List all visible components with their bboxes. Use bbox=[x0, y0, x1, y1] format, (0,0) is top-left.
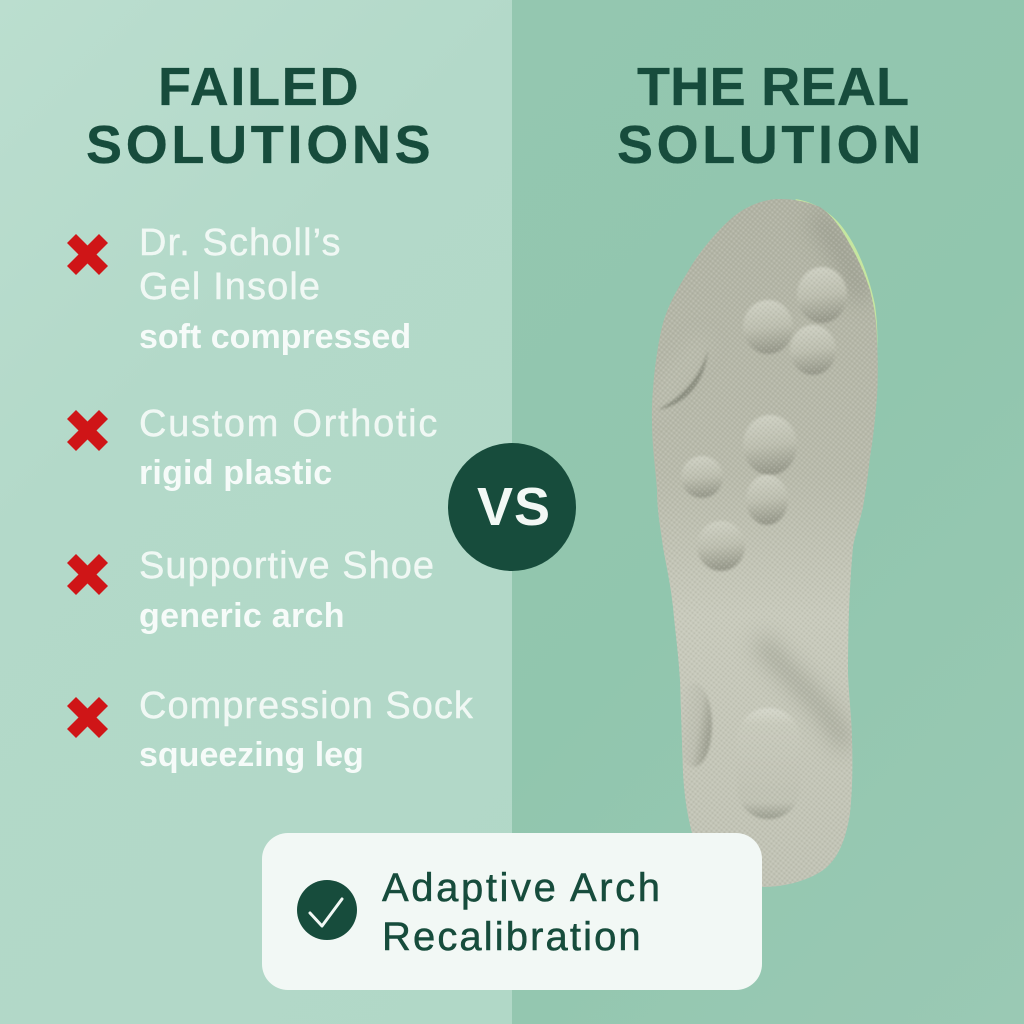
callout text: Adaptive Arch bbox=[382, 866, 663, 910]
callout: Adaptive Arch Recalibration bbox=[262, 833, 762, 990]
heading: the real solution: THE REAL bbox=[637, 57, 909, 117]
list item: Supportive Shoe bbox=[67, 545, 435, 635]
list item: Dr. Scholl's Gel Insole bbox=[67, 222, 411, 356]
item text: generic arch bbox=[139, 597, 345, 635]
heading: the real solution: SOLUTION bbox=[617, 115, 925, 175]
item text: Custom Orthotic bbox=[139, 403, 439, 445]
heading: failed solutions: SOLUTIONS bbox=[86, 115, 434, 175]
item text: rigid plastic bbox=[139, 454, 332, 492]
item text bbox=[139, 545, 435, 635]
badge: VS bbox=[448, 443, 576, 571]
item text: Compression Sock bbox=[139, 685, 474, 727]
icon: check circle bbox=[297, 880, 357, 940]
panel: real solution background bbox=[512, 0, 1024, 1024]
item text bbox=[139, 685, 474, 774]
heading: failed solutions: FAILED bbox=[158, 57, 360, 117]
item text: squeezing leg bbox=[139, 736, 364, 774]
panel: failed solutions background bbox=[0, 0, 512, 1024]
icon: red cross bbox=[67, 554, 108, 595]
green edge of insole bbox=[795, 199, 877, 352]
callout text: Recalibration bbox=[382, 915, 643, 959]
icon: red cross bbox=[67, 697, 108, 738]
item text bbox=[139, 403, 439, 492]
item text: soft compressed bbox=[139, 318, 411, 356]
list item: Custom Orthotic bbox=[67, 403, 439, 492]
icon: red cross bbox=[67, 410, 108, 451]
item text: Supportive Shoe bbox=[139, 545, 435, 587]
icon: insole bbox=[652, 199, 878, 887]
item text bbox=[139, 222, 411, 356]
heading: the real solution bbox=[617, 57, 925, 175]
badge: VS: VS bbox=[477, 477, 551, 537]
heading: failed solutions bbox=[86, 57, 434, 175]
callout text bbox=[382, 866, 663, 959]
item text: Gel Insole bbox=[139, 266, 321, 308]
icon: red cross bbox=[67, 234, 108, 275]
list item: Compression Sock bbox=[67, 685, 474, 774]
item text: Dr. Scholl’s bbox=[139, 222, 342, 264]
